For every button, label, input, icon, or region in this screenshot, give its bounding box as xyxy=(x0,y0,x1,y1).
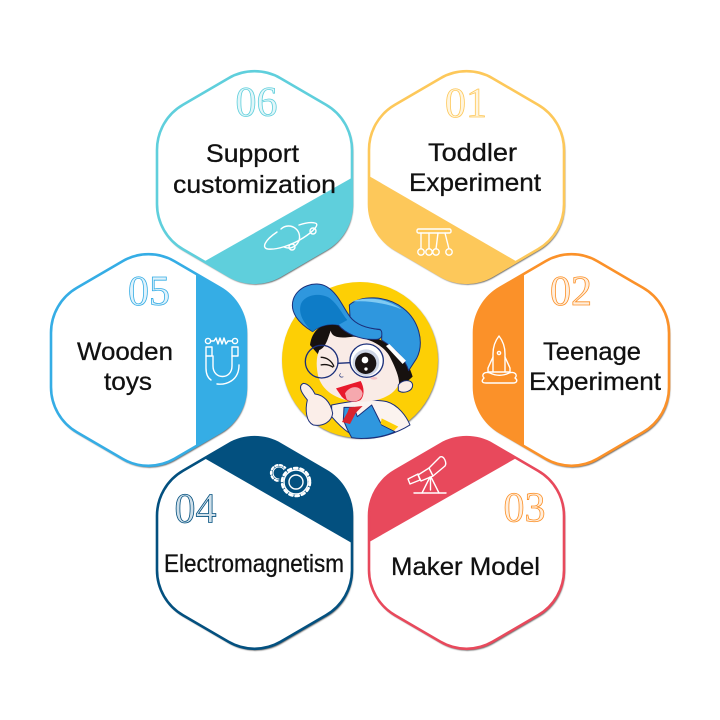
number 02: 02 xyxy=(550,269,592,315)
label: Support customization: customization xyxy=(173,171,336,199)
panel: 06 support customization xyxy=(156,70,354,286)
number 05: 05 xyxy=(128,269,170,315)
right eye xyxy=(353,349,379,376)
panel: 02 teenage experiment xyxy=(472,252,671,469)
icon: newton's cradle xyxy=(417,229,452,255)
number 04: 04 xyxy=(174,486,216,532)
panel: 03 maker model xyxy=(368,436,566,652)
label: Support customization xyxy=(173,140,336,199)
glasses xyxy=(305,344,383,378)
hair highlight xyxy=(386,344,406,364)
label: Maker Model: Maker Model xyxy=(391,553,540,581)
icon: magnet xyxy=(205,338,239,384)
label: Wooden toys xyxy=(77,338,173,396)
panel: 01 toddler experiment xyxy=(368,70,566,286)
cap crown xyxy=(349,298,420,371)
hair xyxy=(310,323,413,385)
label: Electromagnetism: Electromagnetism xyxy=(164,550,344,578)
panel: 05 wooden toys xyxy=(50,252,248,469)
label: Wooden toys: Wooden xyxy=(77,338,173,366)
central mascot xyxy=(282,282,438,439)
icon: telescope xyxy=(408,457,446,493)
label: Wooden toys: toys xyxy=(104,368,152,396)
number 06: 06 xyxy=(236,80,278,126)
icon: gears xyxy=(271,465,313,499)
label: Toddler Experiment: Toddler xyxy=(428,139,517,167)
cap back flap xyxy=(292,284,382,339)
yellow circle xyxy=(282,282,438,439)
mouth xyxy=(336,381,364,402)
nose xyxy=(340,373,343,377)
label: Teenage Experiment: Experiment xyxy=(529,368,661,396)
label: Support customization: Support xyxy=(206,140,299,168)
body xyxy=(332,400,410,438)
icon: planet xyxy=(265,223,317,250)
label: Teenage Experiment: Teenage xyxy=(543,338,641,366)
label: Toddler Experiment: Experiment xyxy=(409,169,541,197)
face xyxy=(317,331,399,402)
winking eye xyxy=(321,357,334,367)
ear xyxy=(398,381,413,392)
number 01: 01 xyxy=(445,81,487,127)
icon: rocket xyxy=(482,336,517,383)
blush xyxy=(371,377,377,380)
thumbs-up hand xyxy=(300,383,333,425)
label: Toddler Experiment xyxy=(409,139,541,197)
number 03: 03 xyxy=(504,486,546,532)
panel: 04 electromagnetism xyxy=(156,436,354,652)
label: Teenage Experiment xyxy=(529,338,661,396)
cartoon boy xyxy=(292,284,420,438)
